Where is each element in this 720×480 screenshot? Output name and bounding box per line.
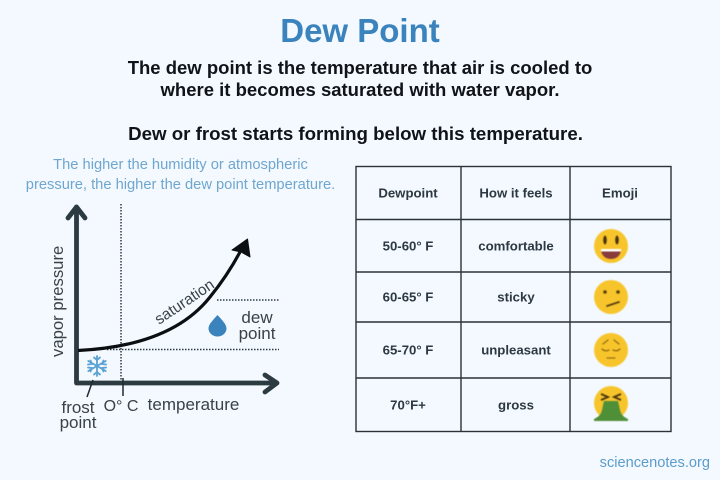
dew point label: point: [239, 324, 276, 343]
frost point label: frost: [61, 398, 95, 417]
frost point pointer: [87, 380, 93, 397]
table: How it feels: [479, 186, 553, 200]
saturation curve: [78, 239, 250, 350]
row 2: 60-65° F: [383, 290, 433, 304]
frost statement: Dew or frost starts forming below this temperature.: [128, 123, 583, 144]
humidity note: pressure, the higher the dew point temperature.: [26, 177, 335, 193]
saturation label: saturation: [152, 276, 218, 328]
row 4: 70°F+: [390, 398, 426, 412]
dew point label: dew: [241, 308, 273, 327]
zero degree dotted line: [120, 204, 122, 383]
zero tick: [122, 378, 124, 396]
row 3: 65-70° F: [383, 342, 433, 358]
definition text: The dew point is the temperature that air is cooled to: [128, 57, 592, 78]
icon: grinning emoji: [594, 229, 628, 263]
table: unpleasant: [481, 342, 551, 358]
temperature label: temperature: [148, 395, 239, 414]
humidity note: [26, 157, 335, 193]
humidity note: The higher the humidity or atmospheric: [53, 157, 308, 173]
icon: water drop: [208, 315, 226, 336]
definition text: where it becomes saturated with water vapor.: [161, 79, 559, 100]
definition text: [128, 57, 592, 100]
table: sticky: [497, 290, 535, 304]
chart: vapor pressure vs temperature: [48, 204, 280, 432]
vapor pressure label: vapor pressure: [48, 246, 67, 357]
dew point dotted lines: [107, 300, 280, 350]
table: comfortable: [478, 238, 554, 254]
table: gross: [498, 398, 534, 412]
axes: [68, 207, 277, 392]
frost point label: point: [60, 413, 97, 432]
icon: vomiting emoji: [594, 386, 628, 421]
header cells: Dewpoint: [378, 186, 438, 200]
zero degrees label: O° C: [104, 398, 138, 415]
source credit: sciencenotes.org: [600, 455, 710, 471]
icon: pensive emoji: [594, 333, 628, 367]
icon: snowflake: [88, 356, 106, 376]
title: Dew Point: [280, 12, 440, 49]
icon: confused emoji: [594, 280, 628, 314]
row 1: 50-60° F: [383, 238, 433, 254]
table: Emoji: [602, 186, 638, 200]
